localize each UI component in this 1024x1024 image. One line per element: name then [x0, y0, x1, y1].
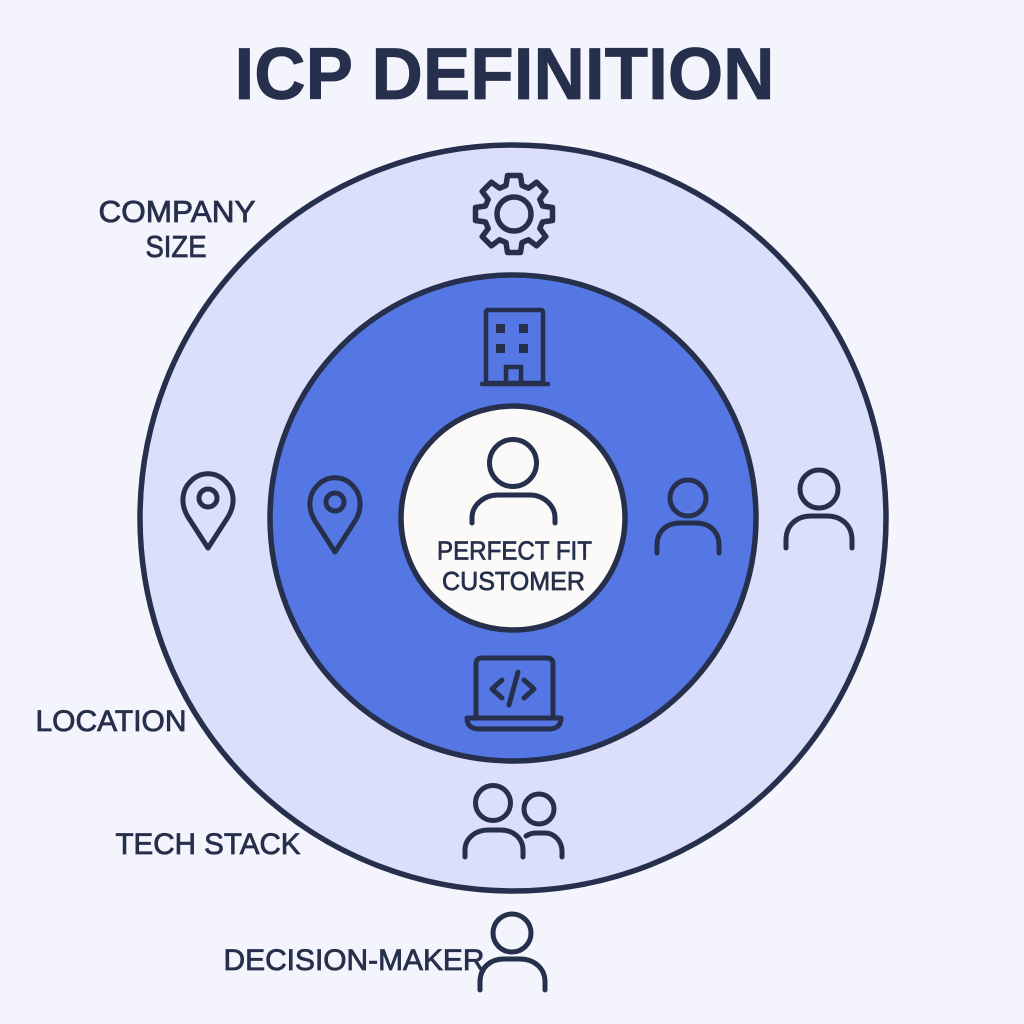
icon: person inner right: [657, 480, 719, 553]
center circle: [401, 406, 625, 630]
label: tech stack: TECH STACK: [116, 828, 300, 861]
icon: person outer right: [786, 470, 852, 548]
label: decision-maker: DECISION-MAKER: [224, 944, 484, 977]
label: location: LOCATION: [36, 705, 186, 738]
label: company size: COMPANY: [98, 194, 256, 229]
icon: person center: [472, 440, 555, 523]
title: ICP DEFINITION: [234, 34, 774, 115]
icon: gear: [476, 176, 552, 252]
icon: location pin inner: [310, 478, 360, 552]
icon: two people: [465, 786, 562, 857]
icon: person bottom: [480, 914, 545, 990]
middle ring: [270, 275, 756, 761]
label: company size: [98, 194, 256, 264]
icon: location pin outer: [183, 474, 233, 548]
outer ring: [140, 145, 886, 891]
center label: PERFECT FIT: [437, 536, 592, 566]
icon: laptop code: [467, 658, 561, 729]
label: company size: SIZE: [146, 229, 206, 264]
center label line 2: CUSTOMER: [442, 566, 585, 596]
icon: building: [482, 310, 548, 384]
